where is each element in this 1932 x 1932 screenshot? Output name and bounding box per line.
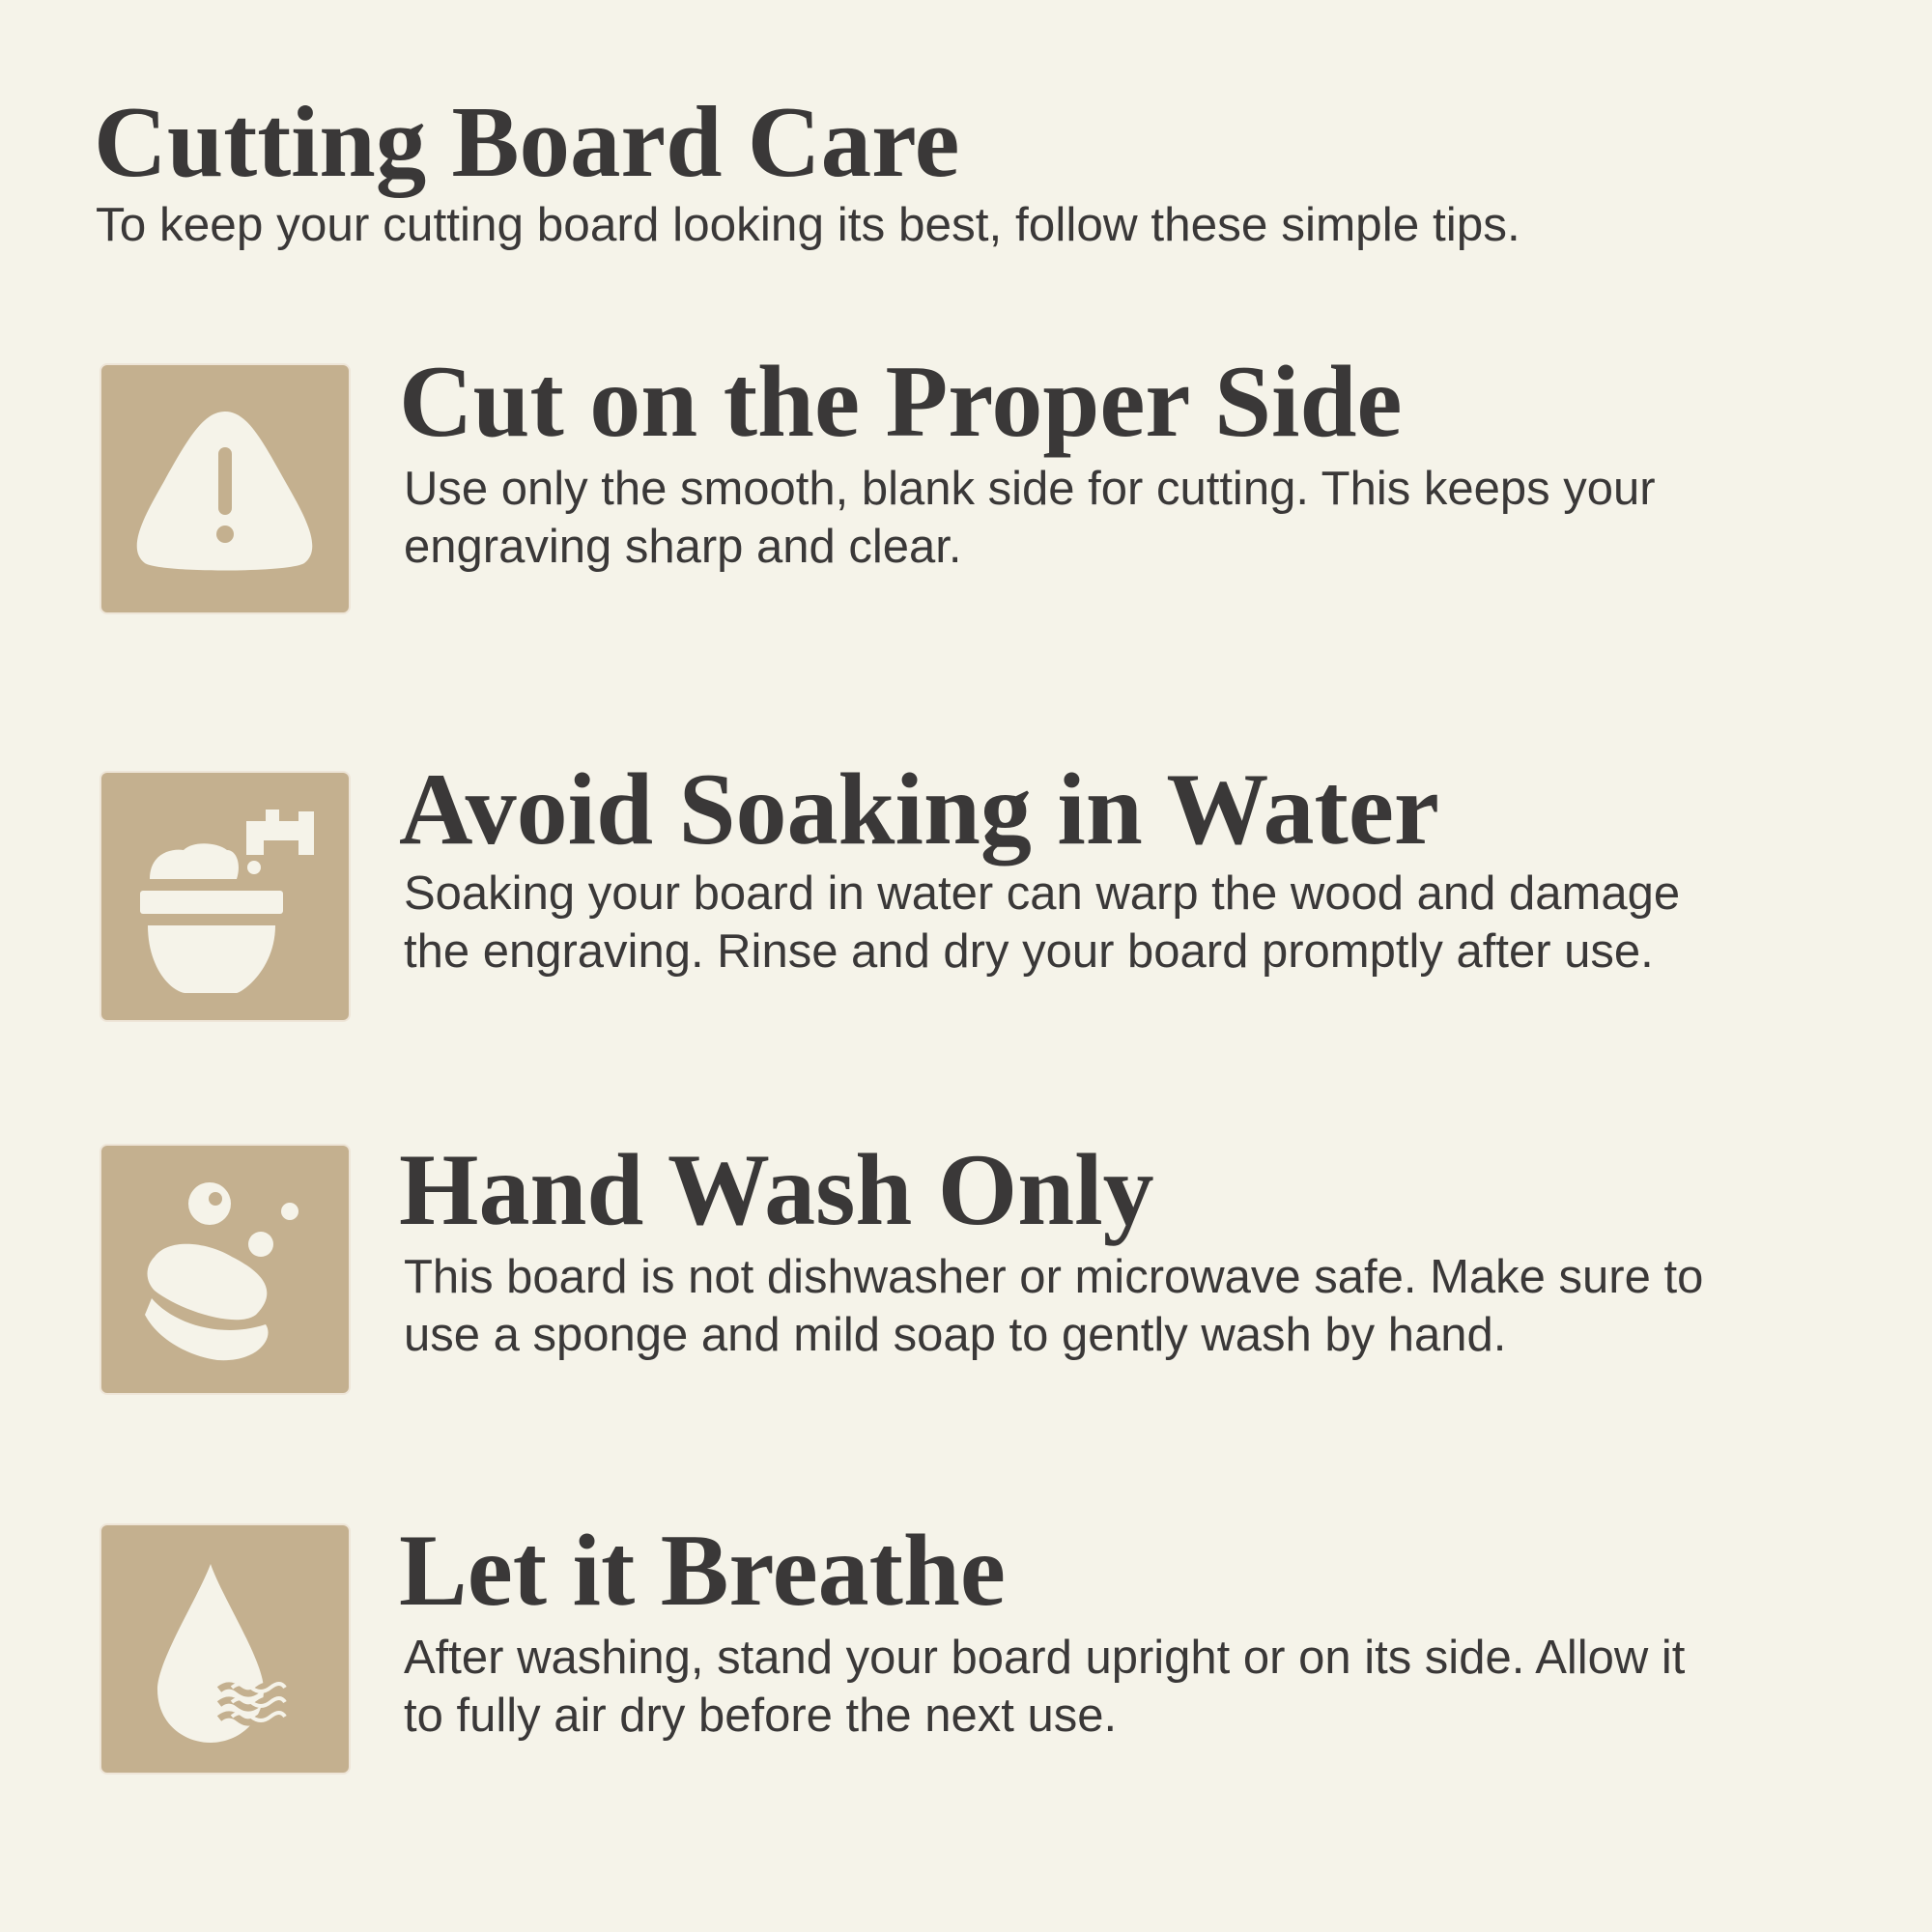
text: hand wash	[404, 1251, 1703, 1361]
text: cut on proper side: Use only the smooth, blank side for cutting. This keeps your	[404, 463, 1656, 515]
text: cut on proper side	[404, 463, 1656, 573]
heading: avoid soaking: Avoid Soaking in Water	[399, 753, 1439, 866]
text: hand wash: This board is not dishwasher or microwave safe. Make sure to	[404, 1251, 1703, 1303]
icon: warning	[101, 365, 349, 612]
text: cut on proper side: engraving sharp and clear.	[404, 521, 962, 573]
icon: bowl and faucet	[101, 773, 349, 1020]
heading: let it breathe: Let it Breathe	[399, 1514, 1006, 1627]
text: avoid soaking: Soaking your board in water can warp the wood and damage	[404, 867, 1680, 920]
text: let it breathe: After washing, stand your board upright or on its side. Allow it	[404, 1632, 1685, 1684]
heading: hand wash: Hand Wash Only	[399, 1133, 1154, 1246]
icon: sponge and bubbles	[101, 1146, 349, 1393]
text: avoid soaking: the engraving. Rinse and dry your board promptly after use.	[404, 925, 1654, 978]
text: let it breathe: to fully air dry before the next use.	[404, 1690, 1117, 1742]
text: hand wash: use a sponge and mild soap to gently wash by hand.	[404, 1309, 1506, 1361]
subtitle: To keep your cutting board looking its best, follow these simple tips.	[96, 198, 1520, 251]
text: let it breathe	[404, 1632, 1685, 1742]
text: avoid soaking	[404, 867, 1680, 978]
title: Cutting Board Care	[94, 85, 959, 198]
icon: water drop	[101, 1525, 349, 1773]
heading: cut on proper side: Cut on the Proper Side	[399, 345, 1402, 458]
